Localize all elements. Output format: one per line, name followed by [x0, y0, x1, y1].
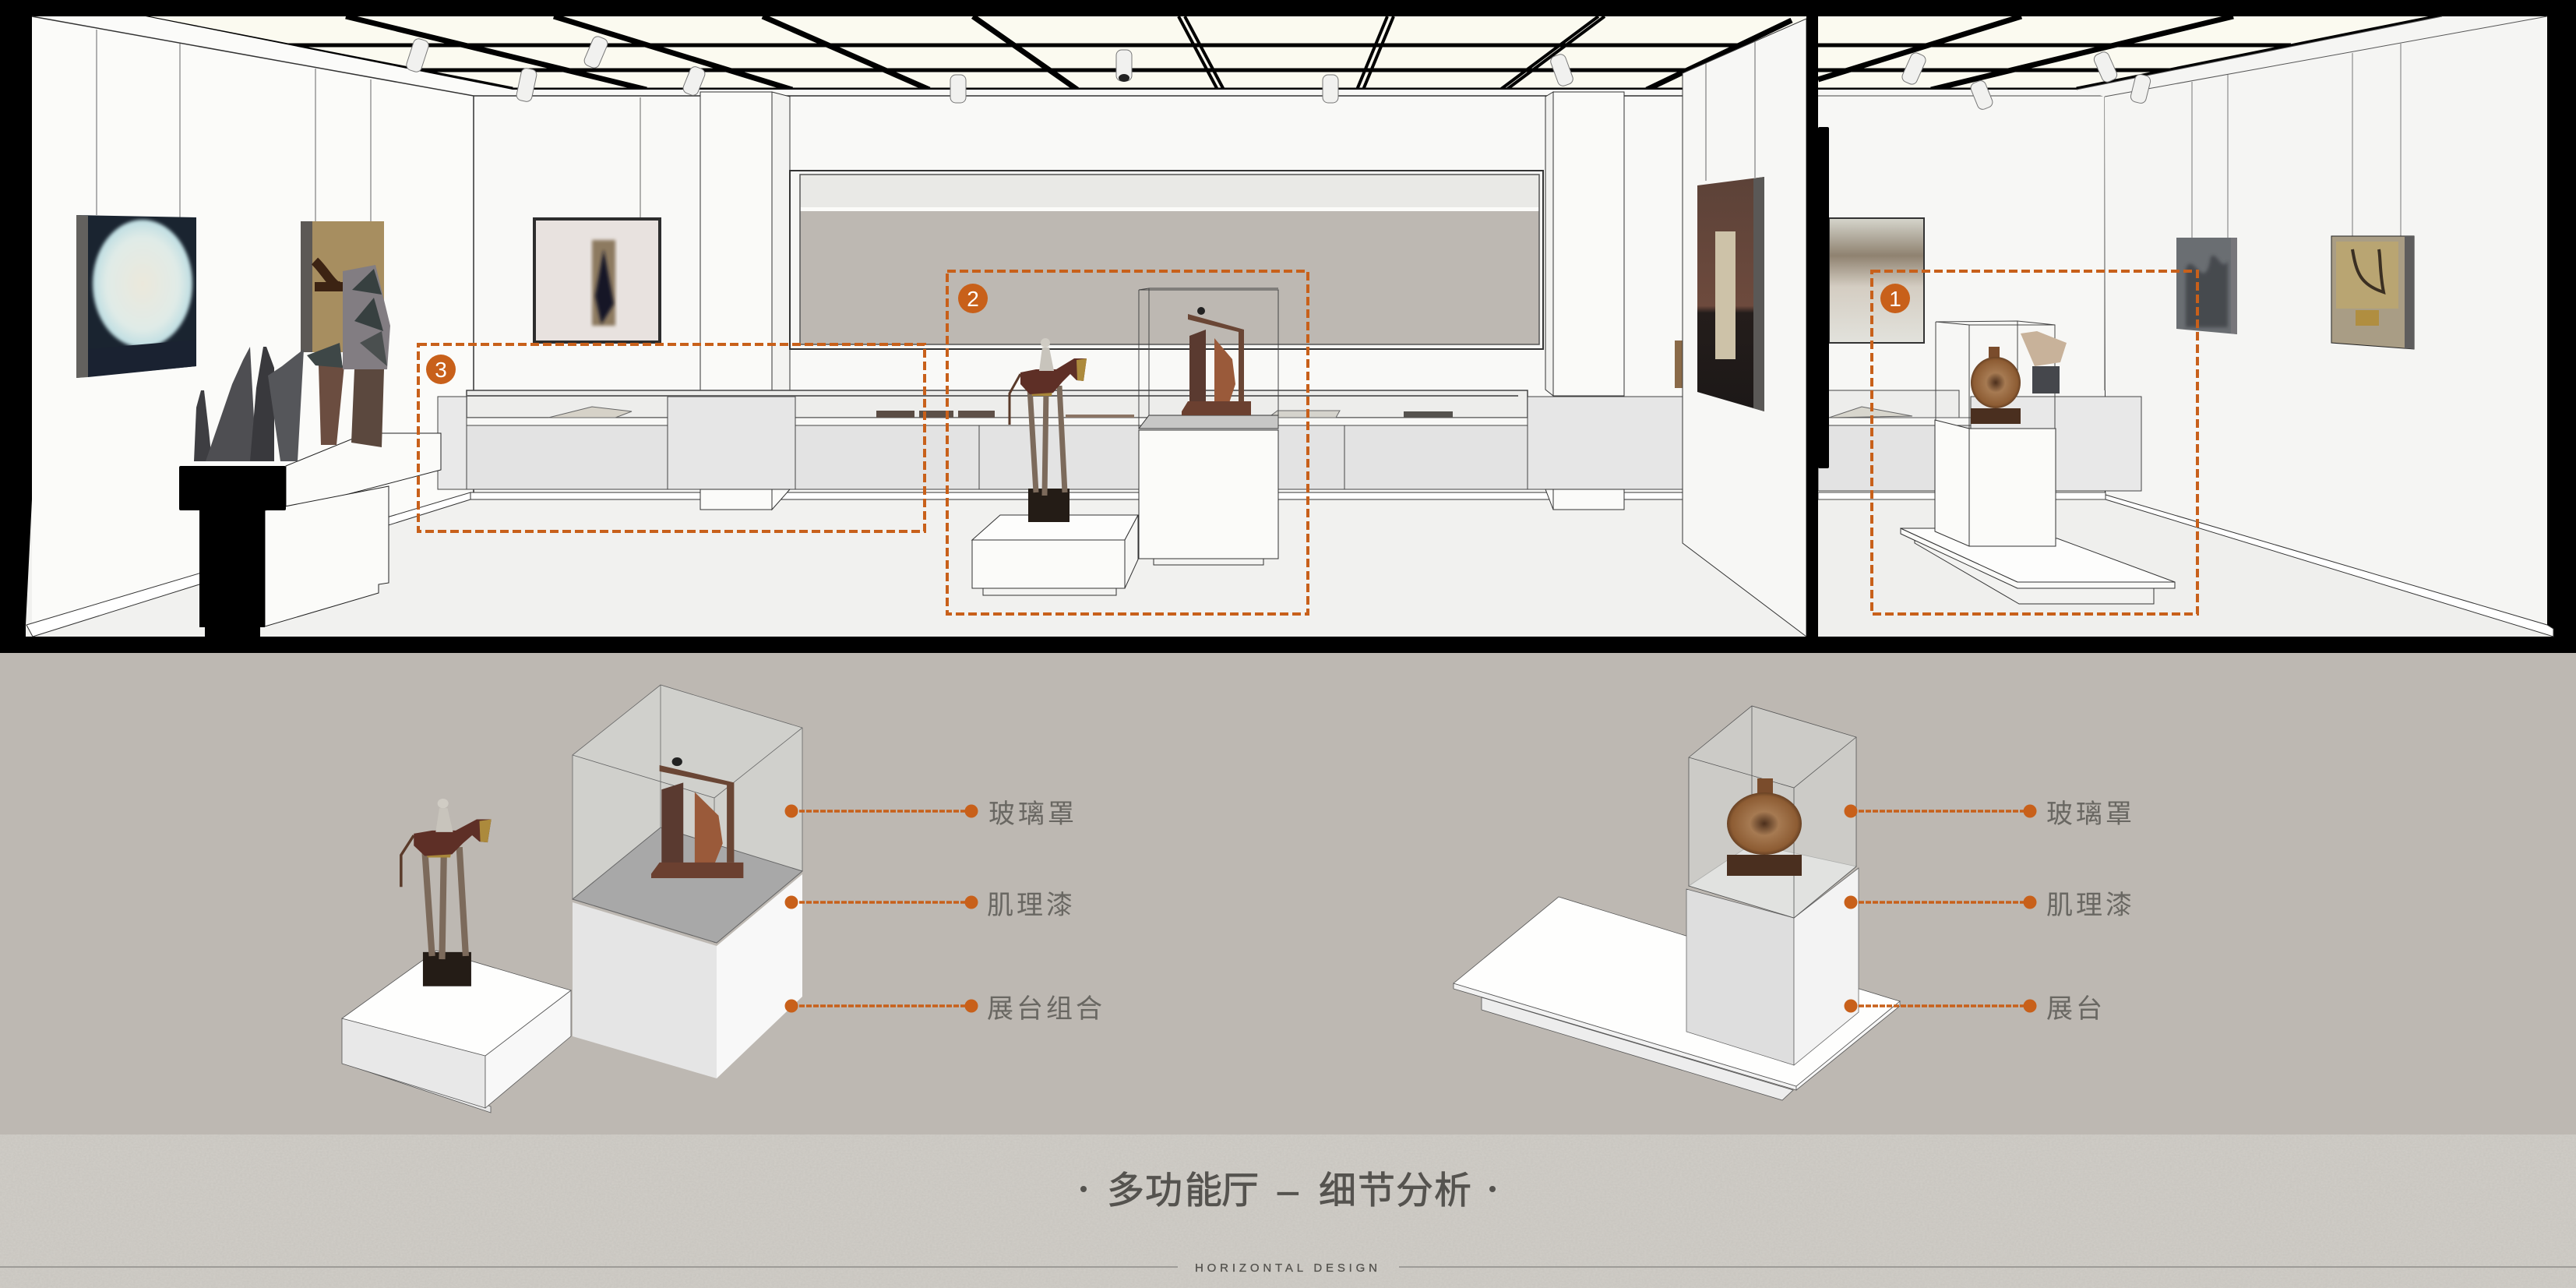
painting: dark slit	[534, 219, 660, 342]
panel: footer band	[0, 1134, 2576, 1288]
tall pedestal body	[573, 874, 802, 1078]
baseboard: back wall	[26, 492, 1683, 637]
display cabinet: long showcase	[438, 390, 1683, 489]
floor: side room	[1818, 499, 2553, 637]
display cabinet: side room showcase	[1818, 390, 2141, 499]
callouts: left group	[785, 799, 1105, 1024]
title dot right	[1489, 1186, 1496, 1192]
callout: textured paint: 肌理漆	[987, 891, 1076, 920]
plinth: low left wall plinth	[265, 433, 441, 626]
callout: pedestal set: 展台组合	[987, 994, 1105, 1024]
painting: side wall brown and cream	[1683, 19, 1806, 637]
footer rule left	[0, 1266, 1178, 1268]
back wall: side room	[1818, 90, 2105, 499]
painting: tan root and gold block	[2331, 236, 2414, 349]
callout: pedestal	[1845, 994, 2106, 1024]
ceiling light panel: side room	[1818, 16, 2442, 90]
low plinth and pedestal with medallion	[1901, 321, 2175, 604]
tall display case with sculpture	[1139, 288, 1278, 565]
tall pedestal	[1686, 844, 1859, 1065]
right wall	[2077, 16, 2547, 625]
glass cover	[573, 685, 802, 943]
panel: black section frame	[0, 0, 2576, 653]
callout: textured paint	[1845, 891, 2135, 920]
hanging wires: left wall	[97, 30, 640, 222]
sculpture: rust arc and slab	[1182, 307, 1251, 415]
artifact: glass sculpture on stand	[2021, 331, 2067, 393]
sculpture: faceted figure	[307, 265, 390, 447]
back window with grey panel	[790, 171, 1543, 349]
artifact: bronze medallion	[1727, 778, 1802, 876]
low cube pedestal	[342, 951, 571, 1113]
callout: pedestal set	[785, 994, 1105, 1024]
left wall	[32, 16, 513, 623]
callout box 3	[418, 344, 925, 531]
callout: pedestal: 展台	[2046, 994, 2106, 1024]
hanging wires: right wall	[2192, 44, 2401, 238]
textured paint top over glass	[573, 827, 802, 943]
panel: detail analysis background	[0, 653, 2576, 1134]
baseboard: right wall	[2106, 495, 2553, 637]
showcase books and objects	[548, 407, 1453, 418]
artifact: bronze medallion	[1971, 347, 2021, 424]
panel: main hall section view	[26, 16, 1806, 639]
badge 2: 2	[967, 287, 979, 311]
column plinths	[700, 489, 1624, 510]
painting: white blue aura	[76, 215, 196, 378]
callout: glass cover	[1845, 799, 2135, 829]
footer rule right	[1399, 1266, 2576, 1268]
badge 3	[426, 355, 456, 384]
callout: glass cover: 玻璃罩	[988, 799, 1077, 829]
pedestal: black silhouette	[179, 466, 286, 639]
back wall	[474, 90, 1689, 499]
glass cover	[1689, 706, 1856, 918]
detail: left display group	[342, 685, 802, 1113]
painting: blurred landscape	[1829, 218, 1924, 343]
callout box 1	[1872, 271, 2197, 614]
artwork edge behind partition	[1675, 341, 1683, 388]
badge 2	[958, 284, 988, 313]
sculpture: horse and rider	[1010, 338, 1087, 522]
badge 3: 3	[435, 358, 447, 382]
track lights	[405, 35, 2151, 111]
badge 1: 1	[1889, 287, 1901, 311]
title dot left	[1080, 1186, 1087, 1192]
sculpture: dark angular group	[194, 347, 304, 461]
panel: side room section view	[1818, 16, 2553, 637]
callout: glass cover: 玻璃罩	[2046, 799, 2135, 829]
badge 1	[1880, 284, 1910, 313]
column: left	[700, 92, 790, 396]
callouts: right group	[1845, 799, 2135, 1024]
plinth base	[1454, 897, 1900, 1100]
detail: right display group	[1454, 706, 1900, 1100]
title: 多功能厅–细节分析	[1107, 1170, 1471, 1212]
textured paint top	[573, 827, 802, 943]
callout: textured paint: 肌理漆	[2046, 891, 2135, 920]
ceiling light panel: main hall	[136, 16, 1806, 90]
brand label: HORIZONTAL DESIGN	[1195, 1262, 1377, 1275]
column: right	[1545, 92, 1624, 396]
floor: main hall	[26, 499, 1806, 637]
callout: glass cover	[785, 799, 1077, 829]
sculpture: rust arc and slab	[651, 757, 743, 878]
callout: textured paint	[785, 891, 1076, 920]
low plinth with horse	[972, 338, 1138, 595]
callout box 2	[947, 271, 1308, 614]
sculpture: horse and rider	[401, 799, 492, 986]
divider wall between rooms	[1806, 0, 1829, 653]
painting: burlap	[301, 221, 384, 352]
painting: ink mountains	[2176, 238, 2237, 334]
